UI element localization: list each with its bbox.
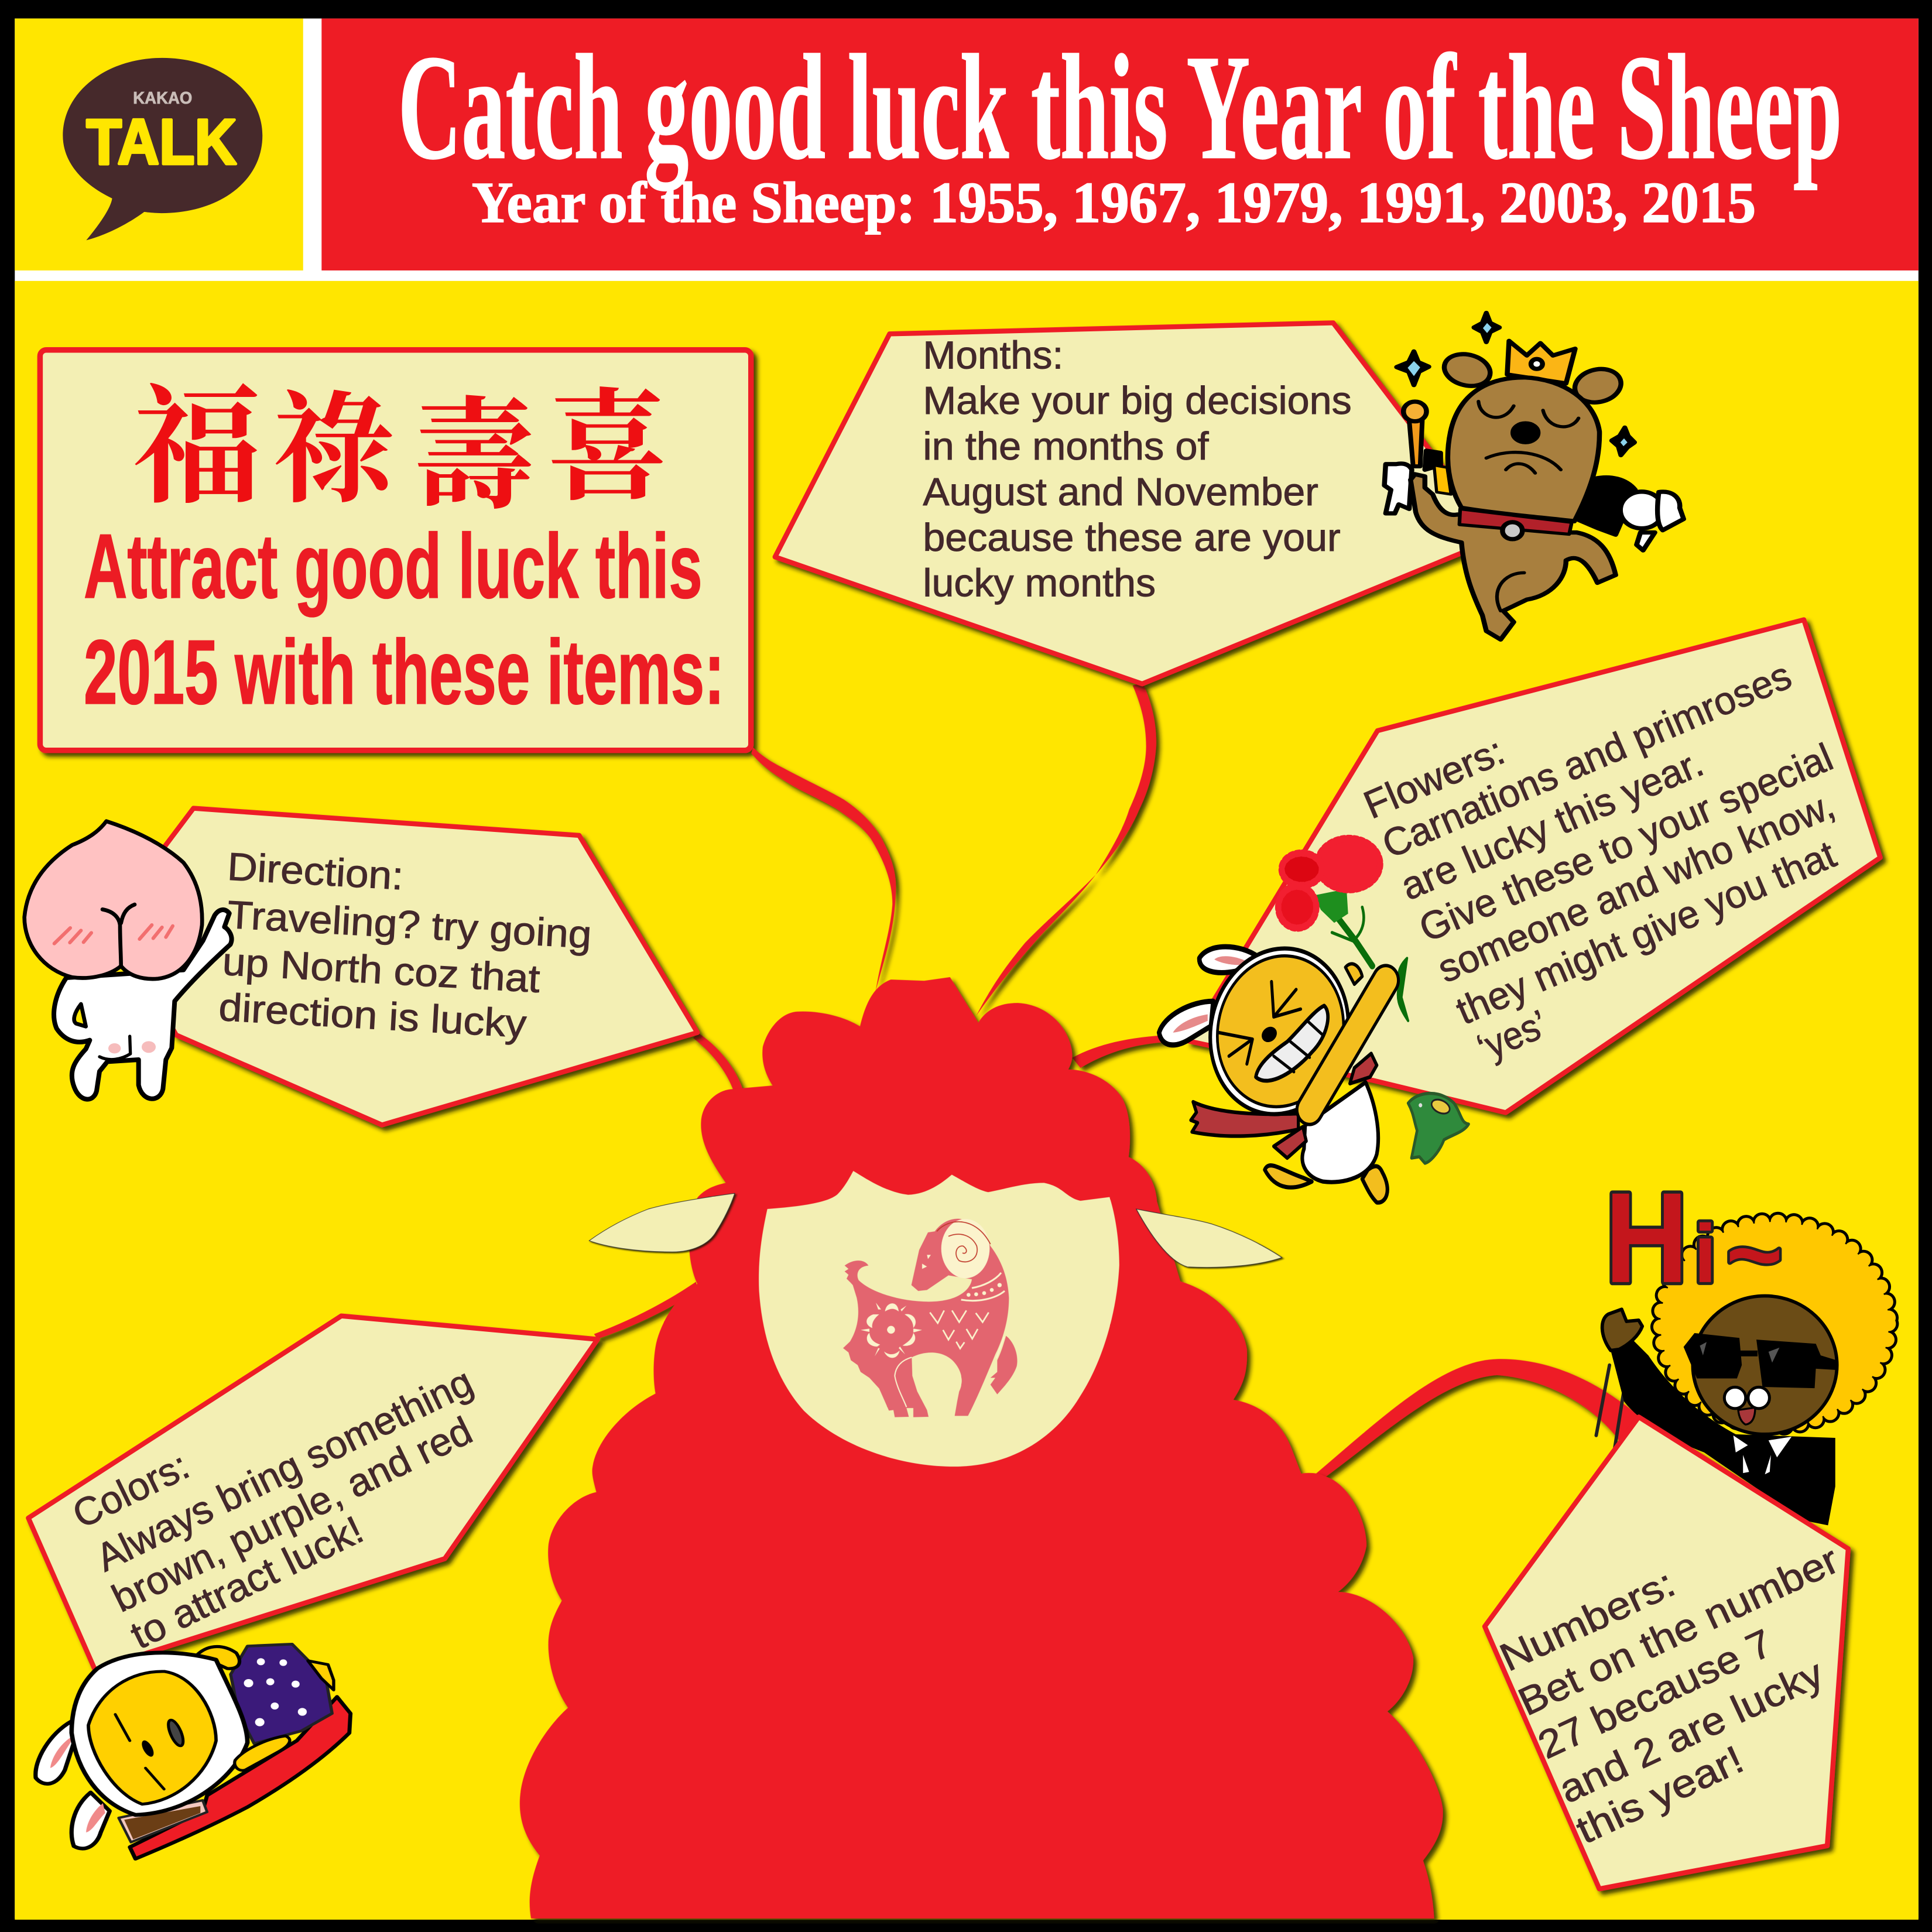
direction text: Traveling? try going (226, 893, 593, 957)
afro rabbit sunglasses (1684, 1333, 1837, 1388)
afro rabbit suit (1611, 1338, 1835, 1525)
afro rabbit head (1693, 1296, 1837, 1434)
flowers text: someone and who know, (1431, 783, 1841, 991)
logo panel (15, 19, 303, 270)
subtitle years: Year of the Sheep: 1955, 1967, 1979, 1991, 2003, 2015 (472, 171, 1756, 235)
numbers text: Numbers: (1493, 1561, 1681, 1680)
months text: Months: (923, 333, 1063, 377)
chinese good fortune characters: 壽 (414, 390, 535, 524)
rabbit scarf (1191, 1053, 1377, 1158)
flowers text: they might give you that (1450, 832, 1842, 1033)
colors text: brown, purple, and red (105, 1409, 479, 1621)
icon: sleeping rabbit mascot (36, 1644, 351, 1859)
icon: afro rabbit mascot saying hi (1596, 1166, 1889, 1525)
icon: peach mascot pointing (25, 821, 232, 1099)
flowers text: are lucky this year. (1395, 741, 1710, 909)
rabbit laughing face (1219, 982, 1328, 1081)
rabbit back leg and foot (1265, 1166, 1312, 1187)
direction text (218, 845, 593, 1046)
flowers text (1358, 653, 1842, 1070)
months text: August and November (923, 470, 1318, 514)
icon: KakaoTalk speech bubble (63, 58, 262, 240)
sheep left ear (589, 1193, 735, 1252)
numbers text: this year! (1570, 1737, 1750, 1852)
connector ribbons to sheep (594, 683, 1639, 1479)
numbers text: 27 because 7 (1532, 1621, 1779, 1767)
afro rabbit nose and mouth (1738, 1407, 1755, 1424)
logo wordmark small: KAKAO (133, 89, 192, 108)
callout: months (775, 323, 1497, 684)
rabbit raised arm (1310, 981, 1386, 1109)
icon: carnation flower (1278, 838, 1408, 1021)
sheep face (759, 1171, 1119, 1467)
panel: lucky items heading (40, 350, 751, 751)
flowers text: ‘yes’ (1471, 1002, 1554, 1070)
colors text: Always bring something (90, 1359, 479, 1580)
numbers text: and 2 are lucky (1553, 1651, 1830, 1812)
logo wordmark large: TALK (86, 107, 237, 178)
hi speech lettering: H (1605, 1166, 1688, 1310)
callout: direction (111, 809, 697, 1125)
chinese good fortune characters: 祿 (273, 384, 398, 518)
heading line two: 2015 with these items: (84, 622, 724, 724)
callout: numbers (1485, 1417, 1848, 1889)
icon: green frog (1408, 1094, 1469, 1163)
callout: colors (28, 1316, 598, 1670)
callout: flowers (1189, 620, 1880, 1112)
hi speech lettering: ~ (1726, 1201, 1783, 1309)
colors text: to attract luck! (124, 1508, 370, 1658)
direction text: up North coz that (221, 940, 542, 1001)
chinese good fortune characters: 福 (133, 378, 261, 520)
months text: Make your big decisions (923, 379, 1352, 423)
flowers text: Flowers: (1358, 729, 1510, 827)
icon: zodiac goat papercut (843, 1219, 1018, 1417)
header banner (321, 19, 1919, 270)
chinese good fortune characters: 喜 (547, 382, 668, 516)
months text: because these are your (923, 516, 1341, 560)
afro rabbit hand (1602, 1309, 1642, 1351)
icon: bear king mascot (1385, 313, 1684, 639)
chinese good fortune characters (133, 378, 668, 524)
flowers text: Give these to your special (1413, 735, 1839, 951)
sheep body (520, 977, 1443, 1919)
heading line one: Attract good luck this (84, 516, 703, 618)
colors text (66, 1359, 479, 1658)
hi speech lettering: i (1694, 1207, 1717, 1300)
direction text: direction is lucky (218, 985, 528, 1046)
colors text: Colors: (66, 1444, 196, 1537)
direction text: Direction: (226, 845, 405, 898)
numbers text: Bet on the number (1512, 1537, 1845, 1724)
months text (923, 333, 1352, 605)
icon: rabbit mascot with carnations (1159, 838, 1469, 1203)
rabbit ears (1159, 1001, 1213, 1045)
months text: in the months of (923, 424, 1209, 468)
hi speech lettering (1605, 1166, 1783, 1310)
rabbit head (1183, 917, 1376, 1146)
months text: lucky months (923, 561, 1156, 605)
numbers text (1493, 1537, 1845, 1852)
rabbit body (1302, 1083, 1378, 1182)
sheep right ear (1136, 1209, 1282, 1268)
flowers text: Carnations and primroses (1376, 653, 1797, 867)
